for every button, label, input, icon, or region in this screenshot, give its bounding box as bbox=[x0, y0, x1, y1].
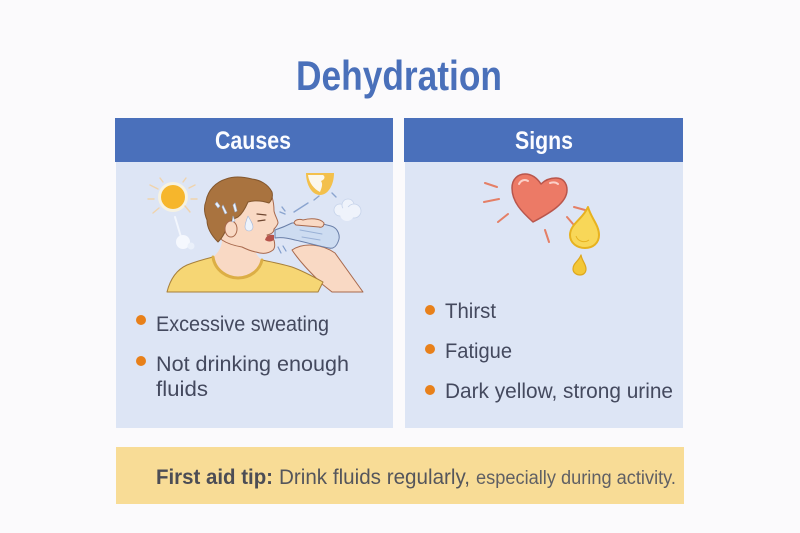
icon: pain rays bbox=[484, 183, 585, 242]
bullet: thirst: Thirst bbox=[445, 300, 496, 323]
causes header bbox=[115, 118, 393, 162]
bullet: not drinking enough fluids bbox=[136, 353, 349, 401]
bullet: excessive sweating: Excessive sweating bbox=[156, 313, 329, 336]
icon: sun bbox=[148, 178, 197, 250]
man: collar bbox=[213, 257, 262, 278]
icon: heart bbox=[512, 174, 567, 222]
man: shirt bbox=[167, 257, 323, 292]
panel: signs bbox=[404, 118, 683, 428]
man: hair bbox=[205, 177, 272, 242]
icon: swirl and cloud bbox=[280, 173, 361, 221]
bullet: not drinking enough fluids: Not drinking enough bbox=[156, 353, 349, 376]
signs list bbox=[425, 300, 673, 403]
callout: first aid tip: First aid tip: bbox=[156, 466, 273, 489]
man: arm bbox=[292, 245, 363, 292]
man: face bbox=[218, 195, 278, 253]
icon: large urine drop bbox=[570, 207, 599, 248]
signs header: Signs bbox=[515, 127, 573, 155]
man: neck bbox=[213, 240, 262, 277]
bullet: fatigue: Fatigue bbox=[445, 340, 512, 363]
bullet: dark urine: Dark yellow, strong urine bbox=[445, 380, 673, 403]
bullet: not drinking enough fluids: fluids bbox=[156, 378, 208, 401]
icon: small urine drop bbox=[573, 255, 586, 275]
causes header: Causes bbox=[215, 127, 291, 155]
panel: causes bbox=[115, 118, 393, 428]
callout: first aid tip: Drink fluids regularly, bbox=[279, 466, 470, 489]
illustration: man drinking from a bottle bbox=[148, 173, 363, 292]
callout: first aid tip: especially during activity. bbox=[476, 468, 676, 489]
icon: water bottle bbox=[275, 223, 339, 248]
man: ear, eye, mouth bbox=[225, 214, 274, 242]
signs header bbox=[404, 118, 683, 162]
title: Dehydration bbox=[296, 52, 502, 99]
man: fingers bbox=[294, 219, 324, 227]
causes list bbox=[136, 313, 349, 401]
callout: first aid tip bbox=[116, 447, 684, 504]
icon: sweat drops bbox=[215, 202, 253, 231]
